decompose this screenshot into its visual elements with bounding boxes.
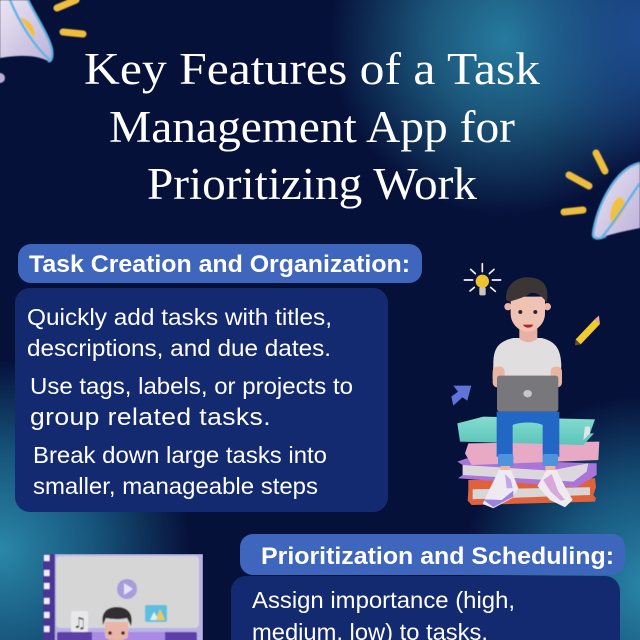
icon: megaphone top left	[0, 0, 83, 83]
stack of books	[457, 417, 599, 505]
text block: task creation points: Use tags, labels, or projects to	[30, 373, 353, 399]
icon: megaphone right	[564, 153, 640, 238]
student figure	[483, 277, 573, 508]
icon: pencil	[575, 316, 600, 345]
heading bar: prioritization	[240, 534, 625, 575]
heading bar: task creation	[18, 244, 422, 283]
text block: task creation points: descriptions, and due dates.	[27, 335, 331, 361]
title: Management App for	[109, 102, 515, 152]
text block: task creation points: Break down large tasks into	[33, 442, 327, 468]
title: Prioritizing Work	[147, 159, 478, 209]
illustration: video editing frame	[43, 554, 203, 640]
title	[84, 44, 541, 209]
title: Key Features of a Task	[84, 44, 541, 94]
text block: task creation points	[15, 288, 388, 512]
icon: music note	[71, 611, 88, 632]
text block: task creation points: Quickly add tasks with titles,	[27, 304, 332, 330]
illustration: student with laptop on books	[451, 264, 600, 508]
panel: prioritization and scheduling	[231, 534, 625, 640]
text block: prioritization points: Assign importance (high,	[252, 587, 515, 613]
icon: photo tile	[145, 605, 167, 622]
icon: play button	[117, 579, 137, 599]
text block: task creation points: smaller, manageable steps	[33, 473, 318, 499]
icon: arrow	[451, 386, 471, 406]
character head	[102, 607, 132, 640]
icon: light bulb	[464, 264, 501, 295]
heading bar: task creation: Task Creation and Organization:	[29, 251, 410, 278]
heading bar: prioritization: Prioritization and Scheduling:	[261, 543, 614, 570]
panel: task creation and organization	[15, 244, 422, 512]
text block: prioritization points	[231, 576, 620, 640]
icon: music note: ♫	[73, 614, 86, 632]
text block: task creation points: group related tasks.	[30, 404, 271, 431]
